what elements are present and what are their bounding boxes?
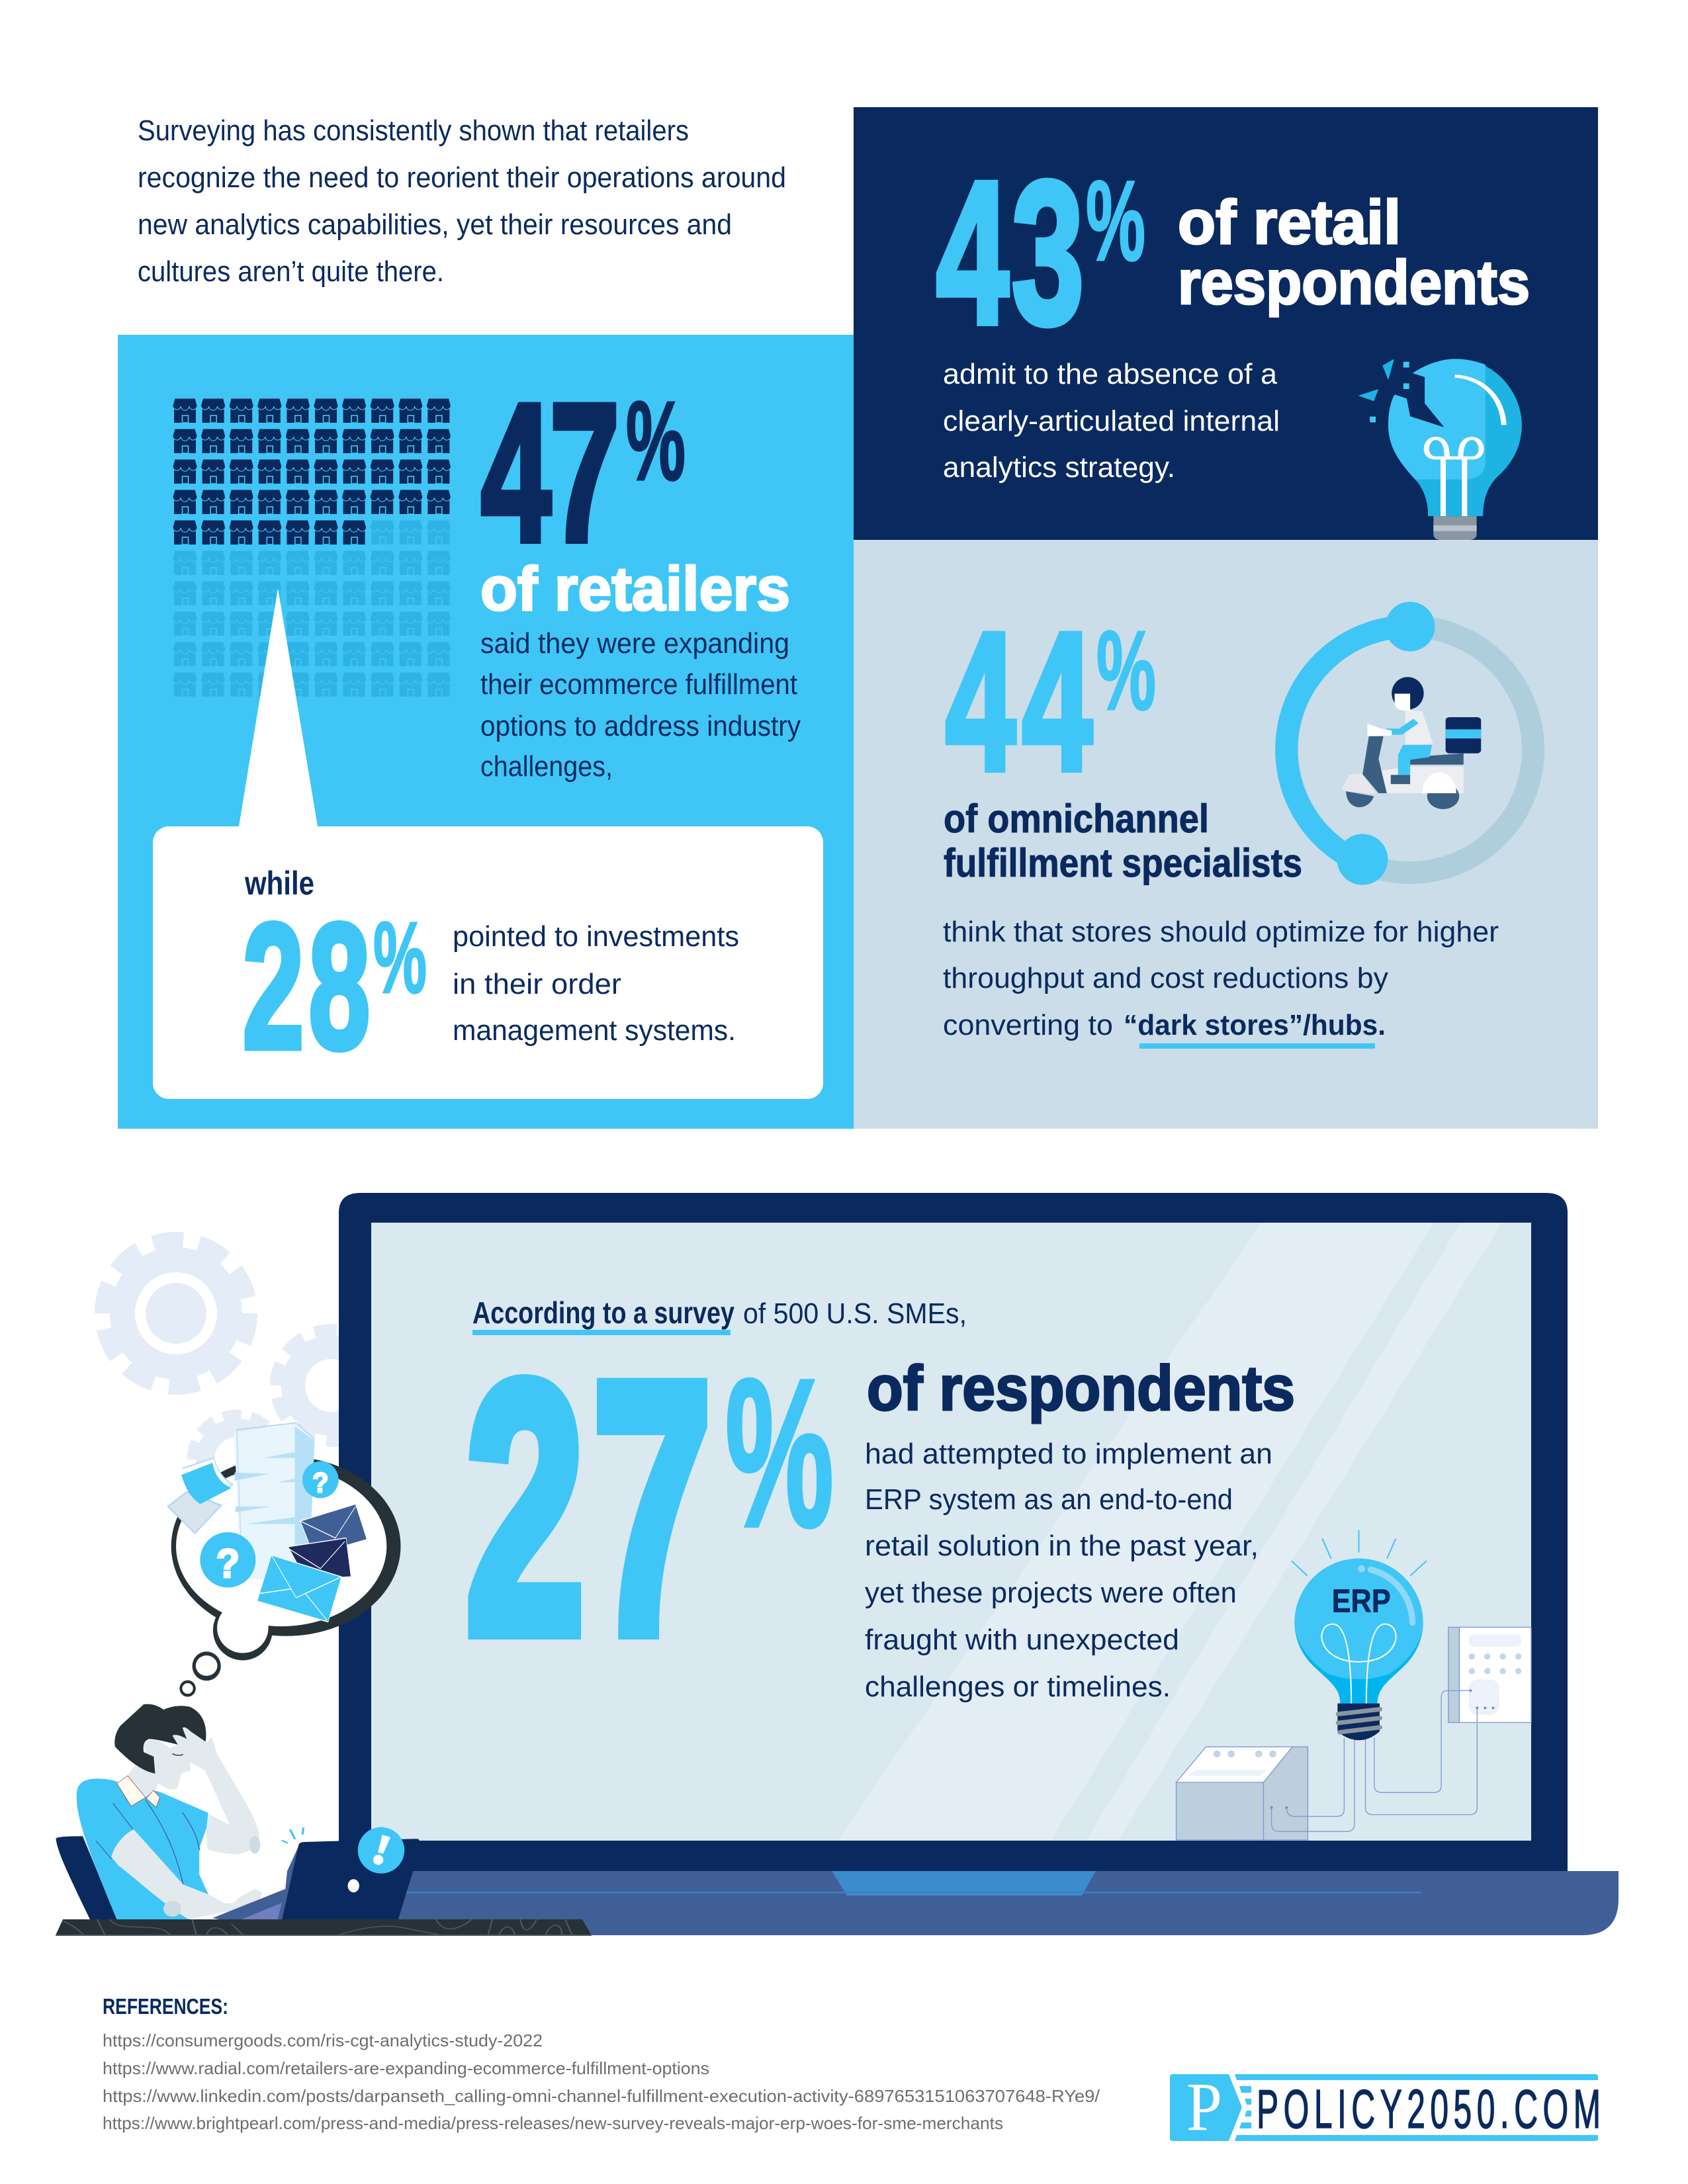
body text: their ecommerce fulfillment bbox=[480, 668, 797, 701]
body text: yet these projects were often bbox=[865, 1577, 1237, 1609]
big number 44% bbox=[946, 591, 1156, 811]
reference links: https://www.linkedin.com/posts/darpanseth_calling-omni-channel-fulfillment-execution-activity-6897653151063707648-RYe9/ bbox=[103, 2086, 1100, 2106]
shirt details bbox=[96, 1800, 200, 1884]
device: panel bbox=[1270, 1627, 1531, 1809]
icon: loose papers bbox=[168, 1458, 233, 1533]
wires bbox=[1272, 1690, 1477, 1831]
icon: envelopes bbox=[257, 1504, 367, 1622]
icon: question marks bbox=[200, 1462, 339, 1587]
big number 44%: % bbox=[1096, 608, 1156, 734]
intro text: new analytics capabilities, yet their resources and bbox=[138, 208, 732, 241]
big number 27% bbox=[466, 1309, 834, 1706]
body text: analytics strategy. bbox=[943, 451, 1175, 484]
laptop base bbox=[371, 1871, 1619, 1935]
callout: while 28% bbox=[153, 588, 823, 1099]
big number 44%: 44 bbox=[946, 591, 1092, 811]
body text: throughput and cost reductions by bbox=[943, 962, 1388, 994]
body text: challenges or timelines. bbox=[865, 1671, 1171, 1703]
body text: clearly-articulated internal bbox=[943, 405, 1280, 437]
big number 47% bbox=[481, 363, 686, 582]
intro text: recognize the need to reorient their operations around bbox=[138, 161, 786, 194]
big number 28%: % bbox=[373, 901, 427, 1014]
callout text: pointed to investments bbox=[453, 920, 739, 953]
icon: ERP bulb: ERP bbox=[1332, 1584, 1391, 1620]
body text: fraught with unexpected bbox=[865, 1624, 1179, 1656]
reference links bbox=[103, 2031, 1100, 2133]
body text: said they were expanding bbox=[480, 627, 789, 660]
logo: Policy2050.com: P bbox=[1186, 2069, 1222, 2145]
heading: of retailers: of retailers bbox=[480, 554, 790, 623]
store icon grid bbox=[173, 398, 451, 697]
logo: Policy2050.com: POLICY2050.COM bbox=[1257, 2078, 1606, 2140]
callout text bbox=[453, 920, 739, 1047]
heading: of omnichannel fulfillment specialists: fulfillment specialists bbox=[944, 841, 1302, 885]
chair bbox=[56, 1836, 117, 1919]
body text: retail solution in the past year, bbox=[865, 1530, 1259, 1562]
logo: Policy2050.com bbox=[1170, 2069, 1606, 2145]
desk bbox=[56, 1919, 592, 1936]
big number 43%: 43 bbox=[936, 139, 1084, 367]
references heading: REFERENCES: bbox=[103, 1994, 228, 2019]
body text: “dark stores”/hubs. bbox=[1124, 1009, 1386, 1041]
device: box bbox=[1177, 1747, 1308, 1840]
body text: think that stores should optimize for higher bbox=[943, 916, 1499, 948]
big number 28% bbox=[242, 887, 427, 1086]
panel: 43% of retail respondents bbox=[854, 107, 1598, 540]
gears background bbox=[103, 1240, 387, 1505]
big number 27%: % bbox=[725, 1336, 834, 1571]
callout text: management systems. bbox=[453, 1014, 736, 1047]
references bbox=[103, 1994, 1100, 2133]
heading: of retail respondents: respondents bbox=[1178, 247, 1530, 317]
callout text: in their order bbox=[453, 968, 621, 1000]
heading: of omnichannel fulfillment specialists bbox=[944, 797, 1302, 885]
heading: of respondents: of respondents bbox=[867, 1353, 1295, 1424]
big number 47%: 47 bbox=[481, 363, 619, 582]
big number 27%: 27 bbox=[466, 1309, 711, 1706]
body text: admit to the absence of a bbox=[943, 358, 1278, 390]
lower arm bbox=[111, 1829, 262, 1919]
heading: of retail respondents bbox=[1178, 187, 1530, 317]
body text: converting to bbox=[943, 1009, 1113, 1041]
progress ring with scooter bbox=[1286, 602, 1533, 885]
body text: options to address industry bbox=[480, 710, 801, 742]
raised arm and hand bbox=[171, 1727, 259, 1855]
body text bbox=[865, 1438, 1272, 1703]
collar bbox=[117, 1776, 160, 1808]
body text: had attempted to implement an bbox=[865, 1438, 1272, 1470]
icon: ERP bulb bbox=[1292, 1530, 1426, 1740]
reference links: https://www.brightpearl.com/press-and-media/press-releases/new-survey-reveals-major-erp-woes-for-sme-merchants bbox=[103, 2113, 1003, 2133]
body text bbox=[943, 916, 1499, 1041]
label: while: while bbox=[244, 865, 314, 902]
big number 47%: % bbox=[626, 378, 686, 504]
face bbox=[144, 1740, 191, 1790]
icon: question marks: ? bbox=[312, 1467, 329, 1499]
illustration: ERP bulb and devices bbox=[1177, 1530, 1531, 1840]
survey intro line: of 500 U.S. SMEs, bbox=[743, 1297, 967, 1330]
monitor bbox=[339, 1193, 1568, 1871]
body text: challenges, bbox=[480, 750, 613, 783]
reference links: https://www.radial.com/retailers-are-expanding-ecommerce-fulfillment-options bbox=[103, 2058, 709, 2078]
torso bbox=[77, 1778, 208, 1919]
body text bbox=[480, 627, 801, 783]
big number 28%: 28 bbox=[242, 887, 370, 1086]
icon: question marks: ? bbox=[216, 1541, 240, 1586]
intro text: cultures aren’t quite there. bbox=[138, 255, 444, 288]
survey intro line: According to a survey bbox=[472, 1295, 734, 1330]
body text bbox=[943, 358, 1280, 484]
heading: of omnichannel fulfillment specialists: of omnichannel bbox=[944, 797, 1209, 841]
heading: of retail respondents: of retail bbox=[1178, 187, 1401, 257]
laptop bbox=[212, 1827, 420, 1931]
intro text: Surveying has consistently shown that retailers bbox=[138, 114, 689, 147]
body text: ERP system as an end-to-end bbox=[865, 1483, 1233, 1516]
reference links: https://consumergoods.com/ris-cgt-analytics-study-2022 bbox=[103, 2031, 543, 2050]
icon: cracked light bulb bbox=[1358, 359, 1522, 540]
survey intro line bbox=[472, 1295, 967, 1335]
icon: stack of documents bbox=[234, 1423, 314, 1579]
big number 43%: % bbox=[1086, 157, 1145, 284]
hair bbox=[114, 1704, 206, 1774]
icon: delivery scooter bbox=[1341, 677, 1481, 809]
panel: 44% omnichannel bbox=[854, 540, 1598, 1129]
intro text bbox=[138, 114, 786, 288]
person at desk bbox=[56, 1704, 420, 1931]
neck bbox=[128, 1765, 161, 1798]
thought bubble bbox=[168, 1423, 400, 1697]
